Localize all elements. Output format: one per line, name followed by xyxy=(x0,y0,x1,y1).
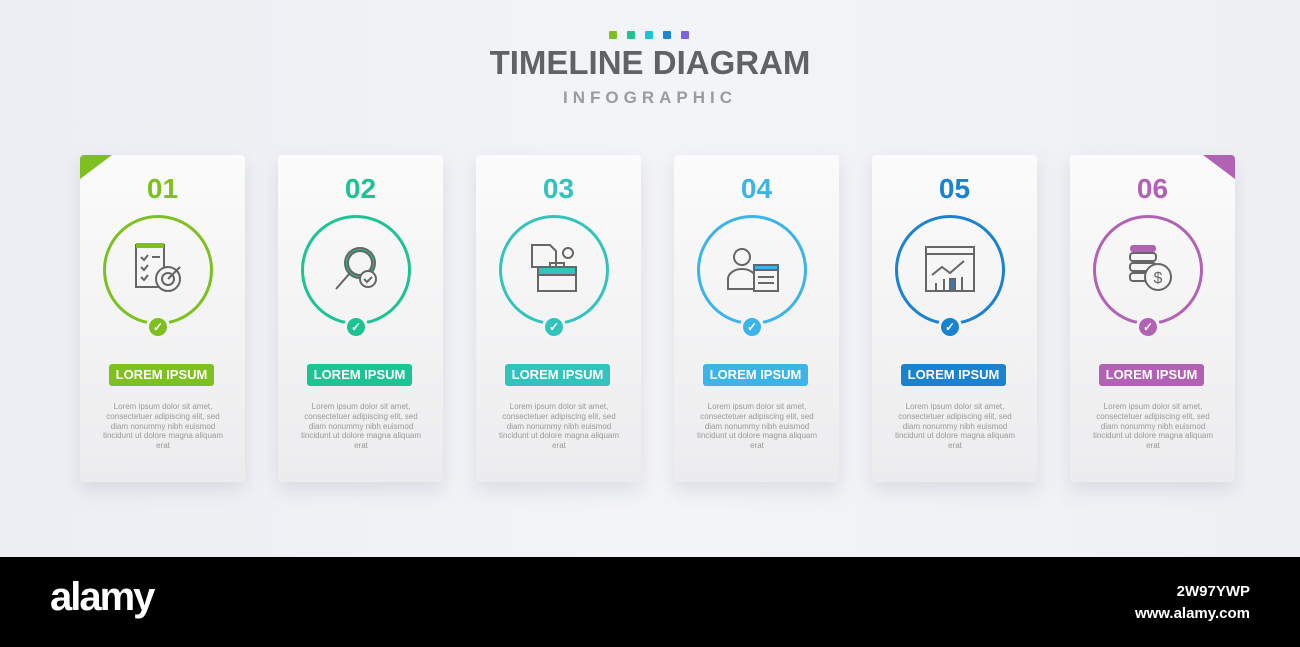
footer bar xyxy=(0,557,1300,647)
label: LOREM IPSUM xyxy=(314,367,405,382)
title: TIMELINE DIAGRAM xyxy=(490,44,810,81)
label xyxy=(1099,364,1204,386)
label: LOREM IPSUM xyxy=(512,367,603,382)
text: Lorem ipsum dolor sit amet, consectetuer adipiscing elit, sed diam nonummy nibh euismod tincidunt ut dolore magna aliquam erat xyxy=(895,402,1015,450)
number 02: 02 xyxy=(345,173,376,204)
id text: 2W97YWP xyxy=(1177,583,1250,600)
label: LOREM IPSUM xyxy=(116,367,207,382)
panel: 06 xyxy=(1070,155,1235,482)
panel: 03 xyxy=(476,155,641,482)
icon: person board xyxy=(727,248,779,292)
icon: briefcase docs xyxy=(531,244,577,292)
label xyxy=(109,364,214,386)
subtitle: INFOGRAPHIC xyxy=(563,88,737,107)
id text: www.alamy.com xyxy=(1135,605,1250,622)
panel: 03: ✓ xyxy=(549,320,559,334)
icon: magnifier xyxy=(335,247,377,290)
number 03: 03 xyxy=(543,173,574,204)
label: LOREM IPSUM xyxy=(710,367,801,382)
panel: 04: ✓ xyxy=(747,320,757,334)
label xyxy=(505,364,610,386)
label: LOREM IPSUM xyxy=(908,367,999,382)
panel: 06: ✓ xyxy=(1143,320,1153,334)
panel: 01 xyxy=(80,155,245,482)
panel: 01: ✓ xyxy=(153,320,163,334)
text: Lorem ipsum dolor sit amet, consectetuer adipiscing elit, sed diam nonummy nibh euismod tincidunt ut dolore magna aliquam erat xyxy=(103,402,223,450)
icon: chart browser xyxy=(925,246,975,292)
icon: coins xyxy=(1129,245,1172,291)
panel: 04 xyxy=(674,155,839,482)
label xyxy=(703,364,808,386)
logo: alamy xyxy=(50,575,153,619)
text: Lorem ipsum dolor sit amet, consectetuer adipiscing elit, sed diam nonummy nibh euismod tincidunt ut dolore magna aliquam erat xyxy=(697,402,817,450)
panel: 05: ✓ xyxy=(945,320,955,334)
number 04: 04 xyxy=(741,173,772,204)
panel: 02: ✓ xyxy=(351,320,361,334)
text: Lorem ipsum dolor sit amet, consectetuer adipiscing elit, sed diam nonummy nibh euismod tincidunt ut dolore magna aliquam erat xyxy=(499,402,619,450)
label xyxy=(901,364,1006,386)
id text xyxy=(1135,583,1250,622)
number 06: 06 xyxy=(1137,173,1168,204)
label: LOREM IPSUM xyxy=(1106,367,1197,382)
number 05: 05 xyxy=(939,173,970,204)
icon: coins: $ xyxy=(1154,270,1163,287)
color dots xyxy=(609,31,689,39)
text: Lorem ipsum dolor sit amet, consectetuer adipiscing elit, sed diam nonummy nibh euismod tincidunt ut dolore magna aliquam erat xyxy=(301,402,421,450)
panel: 05 xyxy=(872,155,1037,482)
label xyxy=(307,364,412,386)
icon: checklist target xyxy=(135,243,181,292)
panel: 02 xyxy=(278,155,443,482)
number 01: 01 xyxy=(147,173,178,204)
text: Lorem ipsum dolor sit amet, consectetuer adipiscing elit, sed diam nonummy nibh euismod tincidunt ut dolore magna aliquam erat xyxy=(1093,402,1213,450)
